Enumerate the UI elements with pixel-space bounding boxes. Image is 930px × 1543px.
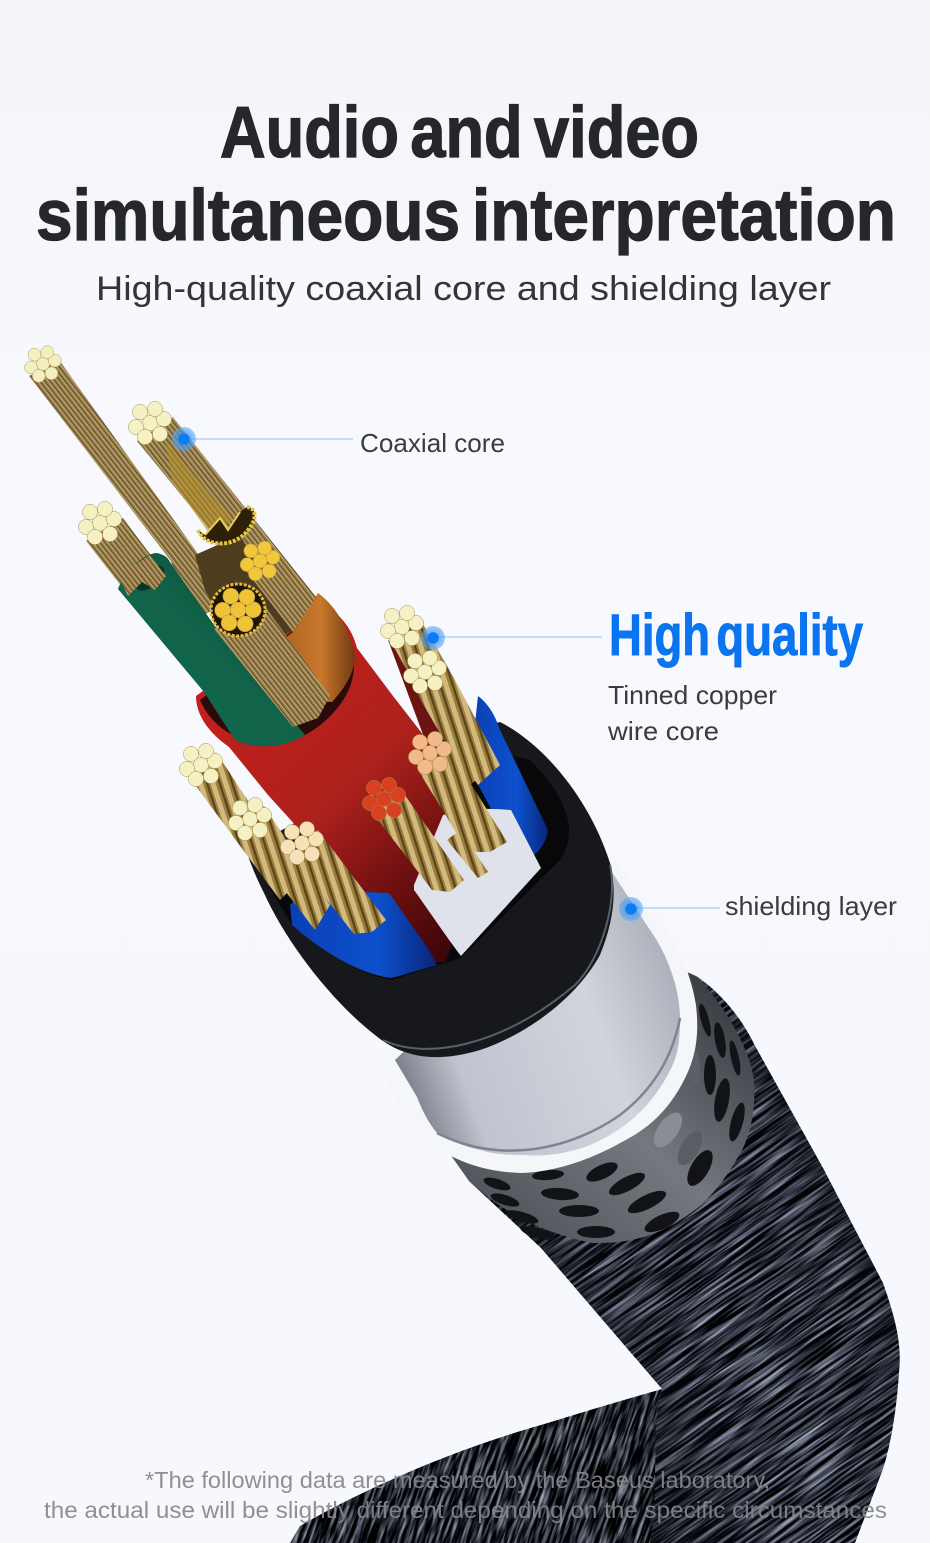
callout: coaxial core: Coaxial core bbox=[360, 428, 505, 458]
red jacket bbox=[196, 603, 480, 962]
footnote bbox=[44, 1467, 887, 1523]
callout: shielding layer bbox=[619, 891, 897, 921]
callout: coaxial core bbox=[172, 427, 505, 458]
gold foil ring bbox=[198, 507, 255, 544]
title: Audio and video bbox=[220, 93, 699, 173]
footnote: the actual use will be slightly different depending on the specific circumstances bbox=[44, 1497, 887, 1523]
twisted wire with red-tinted tip bbox=[408, 731, 507, 852]
twisted wire left middle bbox=[228, 797, 330, 930]
silver shielding foil bbox=[380, 859, 697, 1173]
small twisted wire bbox=[447, 830, 488, 878]
twisted wire red tip bbox=[362, 777, 464, 892]
twisted wire second bbox=[403, 650, 495, 785]
footnote: *The following data are measured by the Baseus laboratory, bbox=[145, 1467, 770, 1493]
strands near orange wire bbox=[240, 541, 316, 632]
callout: high quality tinned copper: Tinned copper bbox=[608, 680, 777, 710]
callout: shielding layer: shielding layer bbox=[725, 891, 897, 921]
orange wire bbox=[270, 593, 355, 702]
perforated metal sleeve bbox=[440, 960, 754, 1243]
coaxial wire with ring bbox=[128, 401, 316, 632]
long coaxial wire bbox=[25, 346, 215, 620]
callout: high quality tinned copper bbox=[421, 603, 863, 746]
dark red strand backing bbox=[388, 640, 450, 740]
green wire bbox=[118, 553, 305, 746]
braided cable sheath bbox=[290, 976, 900, 1543]
black insulating ring bbox=[246, 722, 614, 1057]
white wire bbox=[414, 809, 541, 956]
dark strands between wires bbox=[195, 535, 295, 650]
subtitle: High-quality coaxial core and shielding layer bbox=[96, 270, 831, 308]
twisted wire left front bbox=[280, 821, 386, 934]
title bbox=[36, 93, 896, 256]
blue wire left bbox=[290, 890, 437, 978]
callout: high quality tinned copper: wire core bbox=[607, 716, 719, 746]
twisted wire left bbox=[179, 743, 300, 900]
callout: high quality tinned copper: High quality bbox=[609, 603, 863, 668]
large copper strand bundle bbox=[210, 582, 330, 727]
blue wire right bbox=[470, 696, 548, 862]
short coaxial wire bbox=[78, 501, 168, 600]
twisted wire top bbox=[380, 605, 500, 785]
